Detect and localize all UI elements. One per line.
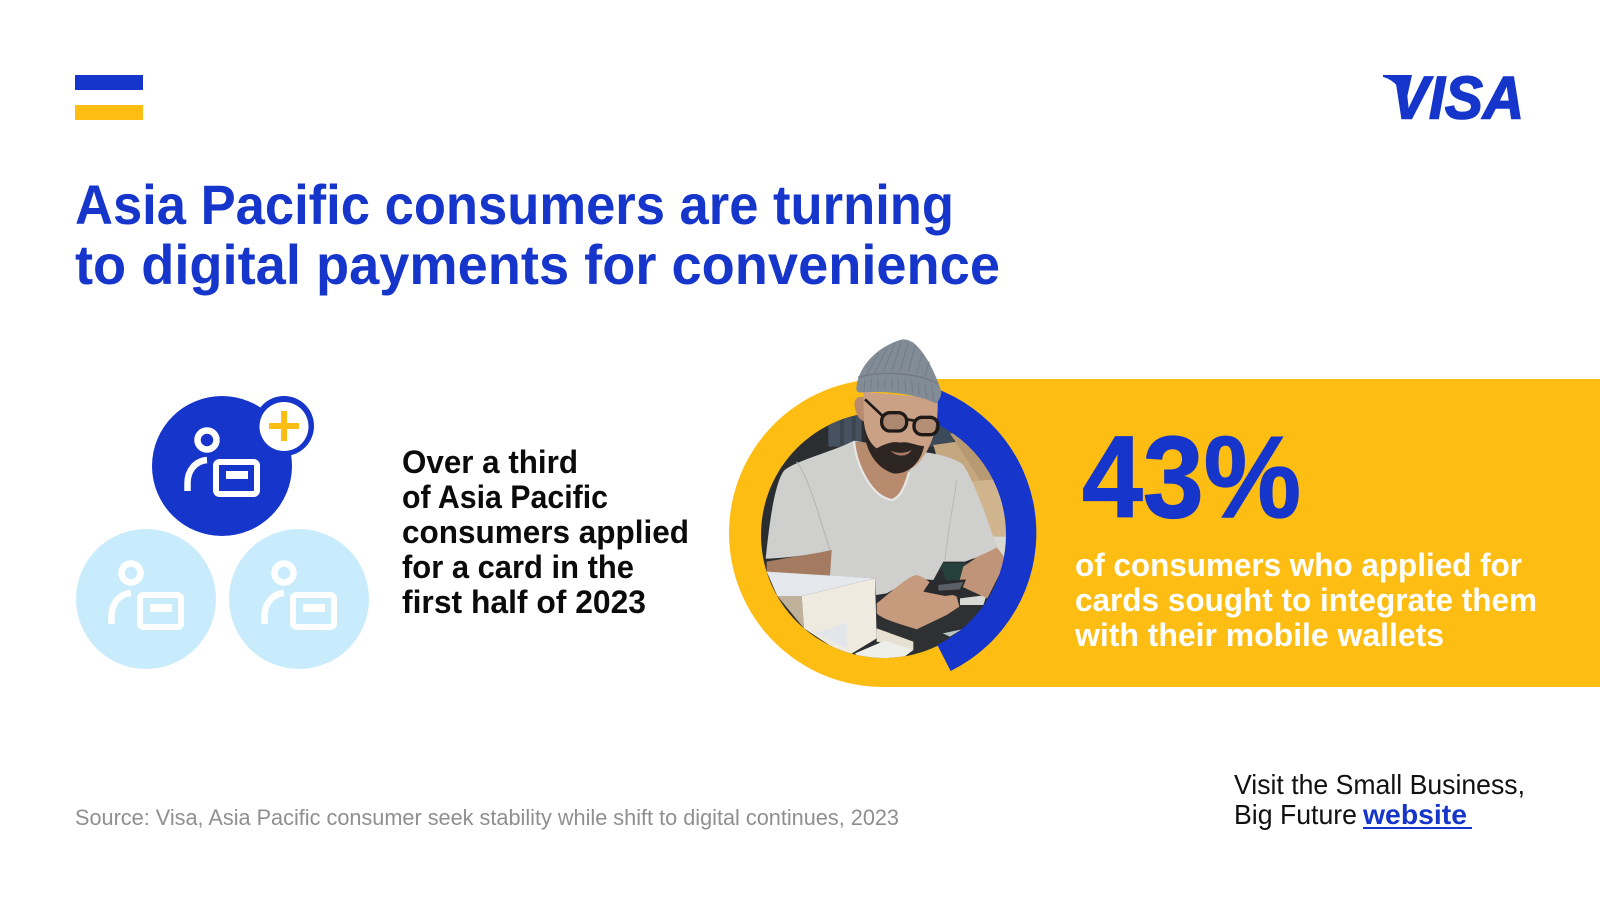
- glasses: [865, 399, 938, 435]
- icon group: one in three consumers: [76, 396, 369, 669]
- call to action: website: [1362, 799, 1467, 830]
- text: over a third of consumers: of Asia Pacific: [402, 479, 608, 515]
- yellow banner with circle: [729, 379, 1600, 687]
- title: [75, 173, 1000, 296]
- Visa logo: VISA: [1391, 64, 1524, 132]
- brand flag bars: [75, 75, 143, 120]
- ear: [855, 397, 866, 422]
- right arm: [960, 547, 1004, 598]
- call to action: [1234, 769, 1525, 830]
- stat description: with their mobile wallets: [1074, 617, 1444, 653]
- big stat: 43%: [1082, 412, 1301, 542]
- phone: [923, 579, 966, 596]
- beanie hat: [856, 339, 941, 403]
- stat description: [1074, 547, 1537, 653]
- hand: [877, 575, 959, 629]
- beard: [864, 423, 924, 473]
- box: [767, 572, 875, 596]
- stat description: of consumers who applied for: [1075, 547, 1522, 583]
- source note: Source: Visa, Asia Pacific consumer seek stability while shift to digital continues, 2023: [75, 805, 899, 830]
- lower lip: [891, 450, 911, 456]
- stat description: cards sought to integrate them: [1075, 582, 1537, 618]
- face: [863, 392, 938, 473]
- left forearm: [767, 550, 832, 578]
- text: over a third of consumers: [402, 444, 689, 620]
- title: to digital payments for convenience: [75, 233, 1000, 296]
- call to action: Big Future: [1234, 799, 1357, 830]
- neck and collar: [854, 442, 910, 499]
- back desk: [903, 646, 938, 656]
- call to action: Visit the Small Business,: [1234, 769, 1525, 800]
- photo: man with phone and blue ring: [757, 339, 1036, 671]
- text: over a third of consumers: for a card in the: [402, 549, 634, 585]
- blue progress ring: [930, 388, 1036, 671]
- text: over a third of consumers: first half of 2023: [402, 584, 646, 620]
- title: Asia Pacific consumers are turning: [75, 173, 954, 236]
- text: over a third of consumers: Over a third: [402, 444, 578, 480]
- t-shirt: [766, 441, 997, 595]
- text: over a third of consumers: consumers applied: [402, 514, 689, 550]
